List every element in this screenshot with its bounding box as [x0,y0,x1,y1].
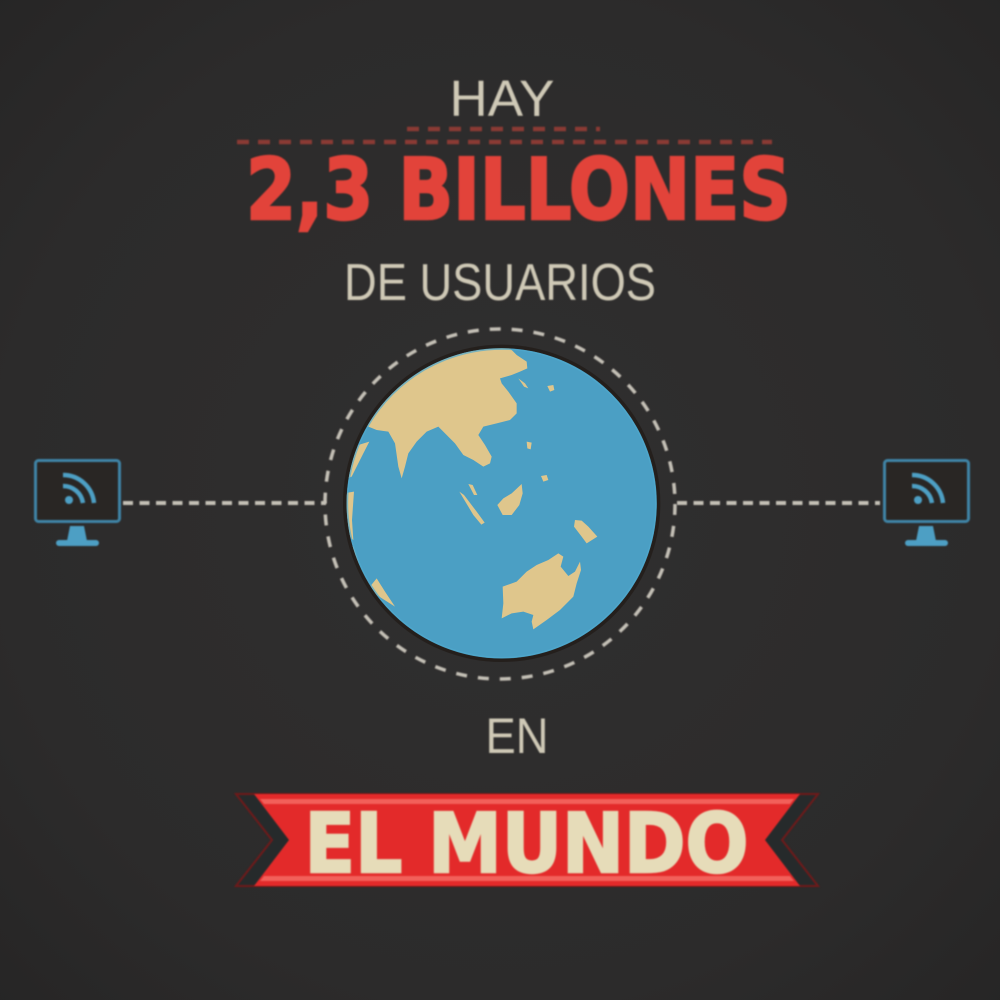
ribbon text: EL MUNDO: EL MUNDO [304,797,748,892]
dotted rules under heading [237,129,772,142]
ribbon: back tails [236,794,818,886]
headline number: 2,3 BILLONES: 2,3 BILLONES [246,141,791,240]
land: Asia [353,347,527,478]
globe [340,345,660,662]
land: lower-left rim [352,546,395,606]
land: Africa edge [346,492,354,540]
subheading: DE USUARIOS: DE USUARIOS [344,254,656,312]
dashed connector: right [677,501,880,505]
heading: HAY: HAY [450,70,554,127]
icon: left monitor with wifi signal [36,460,120,546]
dashed ring around globe [325,329,675,679]
land: Arabia edge [348,442,370,478]
ribbon: light stripes [260,799,794,881]
infographic canvas [33,80,971,888]
dashed connector: left [123,501,326,505]
land: Sumatra and Java [459,484,485,525]
land: small islands [518,378,554,482]
ribbon: front band [254,794,800,886]
icon: right monitor with wifi signal [884,460,968,546]
label: EN: EN [486,708,548,764]
land: Borneo [497,484,523,515]
land: Australia [502,553,581,629]
land: New Guinea [574,520,597,543]
ribbon banner [236,794,818,892]
